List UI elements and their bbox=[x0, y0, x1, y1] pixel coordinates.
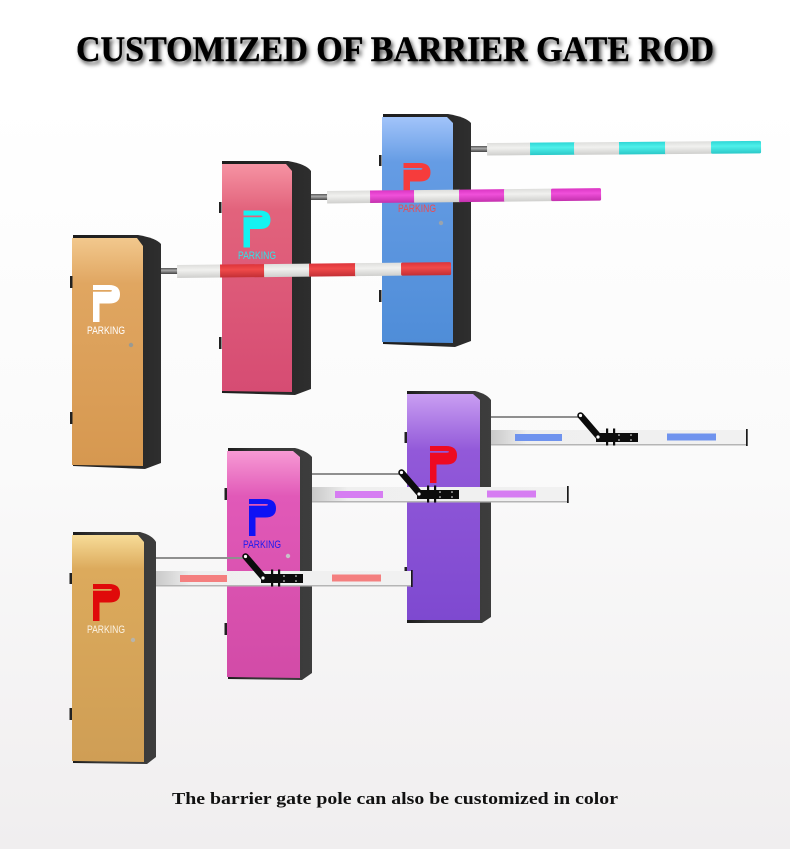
folding boom: red stripes bbox=[156, 555, 413, 587]
elbow joint bbox=[400, 471, 459, 502]
elbow joint bbox=[579, 414, 638, 446]
logo text: red parking: PARKING bbox=[398, 203, 436, 215]
light stripes bbox=[515, 434, 716, 441]
logo P: white bbox=[93, 285, 120, 322]
gate: gold cabinet with folding boom bbox=[70, 532, 413, 764]
cabinet body: purple bbox=[407, 391, 491, 623]
round rod: red and white bbox=[177, 262, 451, 278]
gate: orange cabinet with red round rod bbox=[70, 235, 451, 469]
boom arm bbox=[491, 430, 747, 445]
gate: blue cabinet with cyan round rod bbox=[379, 114, 761, 347]
round rod: magenta and white bbox=[327, 188, 601, 203]
door lock: blue bbox=[439, 221, 443, 225]
logo text: white parking on gold: PARKING bbox=[87, 624, 125, 636]
cabinet body: orange bbox=[73, 235, 161, 469]
caption: The barrier gate pole can also be customized in color bbox=[172, 789, 619, 808]
door panel: gold bbox=[72, 535, 144, 762]
door hinges: red bbox=[219, 202, 222, 349]
end cap bbox=[746, 429, 748, 446]
round rod: cyan and white bbox=[487, 141, 761, 155]
gate: red cabinet with magenta round rod bbox=[219, 161, 601, 395]
light stripes bbox=[335, 490, 536, 498]
door panel: orange bbox=[72, 238, 143, 466]
end cap bbox=[567, 486, 569, 503]
door lock: pink bbox=[286, 554, 290, 558]
elbow joint bbox=[244, 555, 303, 586]
logo P: red bbox=[404, 163, 430, 200]
door hinges: purple bbox=[404, 432, 407, 578]
logo P: red on gold bbox=[93, 584, 120, 621]
door lock: gold bbox=[131, 638, 135, 642]
motor shaft: blue bbox=[471, 146, 488, 152]
door panel: pink bbox=[227, 451, 300, 678]
door panel: blue bbox=[382, 117, 453, 343]
motor shaft: orange bbox=[161, 268, 178, 274]
folding boom: blue stripes bbox=[491, 414, 748, 446]
title: CUSTOMIZED OF BARRIER GATE ROD bbox=[76, 29, 714, 69]
link rod bbox=[156, 557, 246, 559]
logo P: cyan bbox=[244, 210, 270, 248]
door lock: orange bbox=[129, 343, 133, 347]
logo P: red on purple bbox=[430, 446, 457, 483]
gate: pink cabinet with folding boom bbox=[224, 448, 569, 680]
light stripes bbox=[180, 574, 381, 582]
logo text: cyan parking: PARKING bbox=[238, 250, 276, 262]
door hinges: pink bbox=[224, 488, 227, 635]
door hinges: blue bbox=[379, 155, 382, 302]
cabinet body: blue bbox=[383, 114, 471, 347]
cabinet body: gold bbox=[73, 532, 156, 764]
gate: purple cabinet with folding boom bbox=[404, 391, 748, 623]
cabinet body: pink bbox=[228, 448, 312, 680]
logo text: blue parking: PARKING bbox=[243, 539, 281, 551]
boom arm bbox=[156, 571, 412, 586]
link rod bbox=[312, 473, 402, 475]
cabinet body: red bbox=[222, 161, 311, 395]
door panel: red bbox=[222, 164, 292, 392]
motor shaft: red bbox=[311, 194, 328, 200]
door hinges: orange bbox=[70, 276, 72, 424]
end cap bbox=[411, 570, 413, 587]
folding boom: violet stripes bbox=[312, 471, 569, 503]
door panel: purple bbox=[407, 394, 480, 620]
boom arm bbox=[312, 487, 568, 502]
logo text: white parking: PARKING bbox=[87, 325, 125, 337]
door hinges: gold bbox=[70, 573, 72, 720]
logo P: blue bbox=[249, 499, 276, 536]
link rod bbox=[491, 416, 581, 418]
